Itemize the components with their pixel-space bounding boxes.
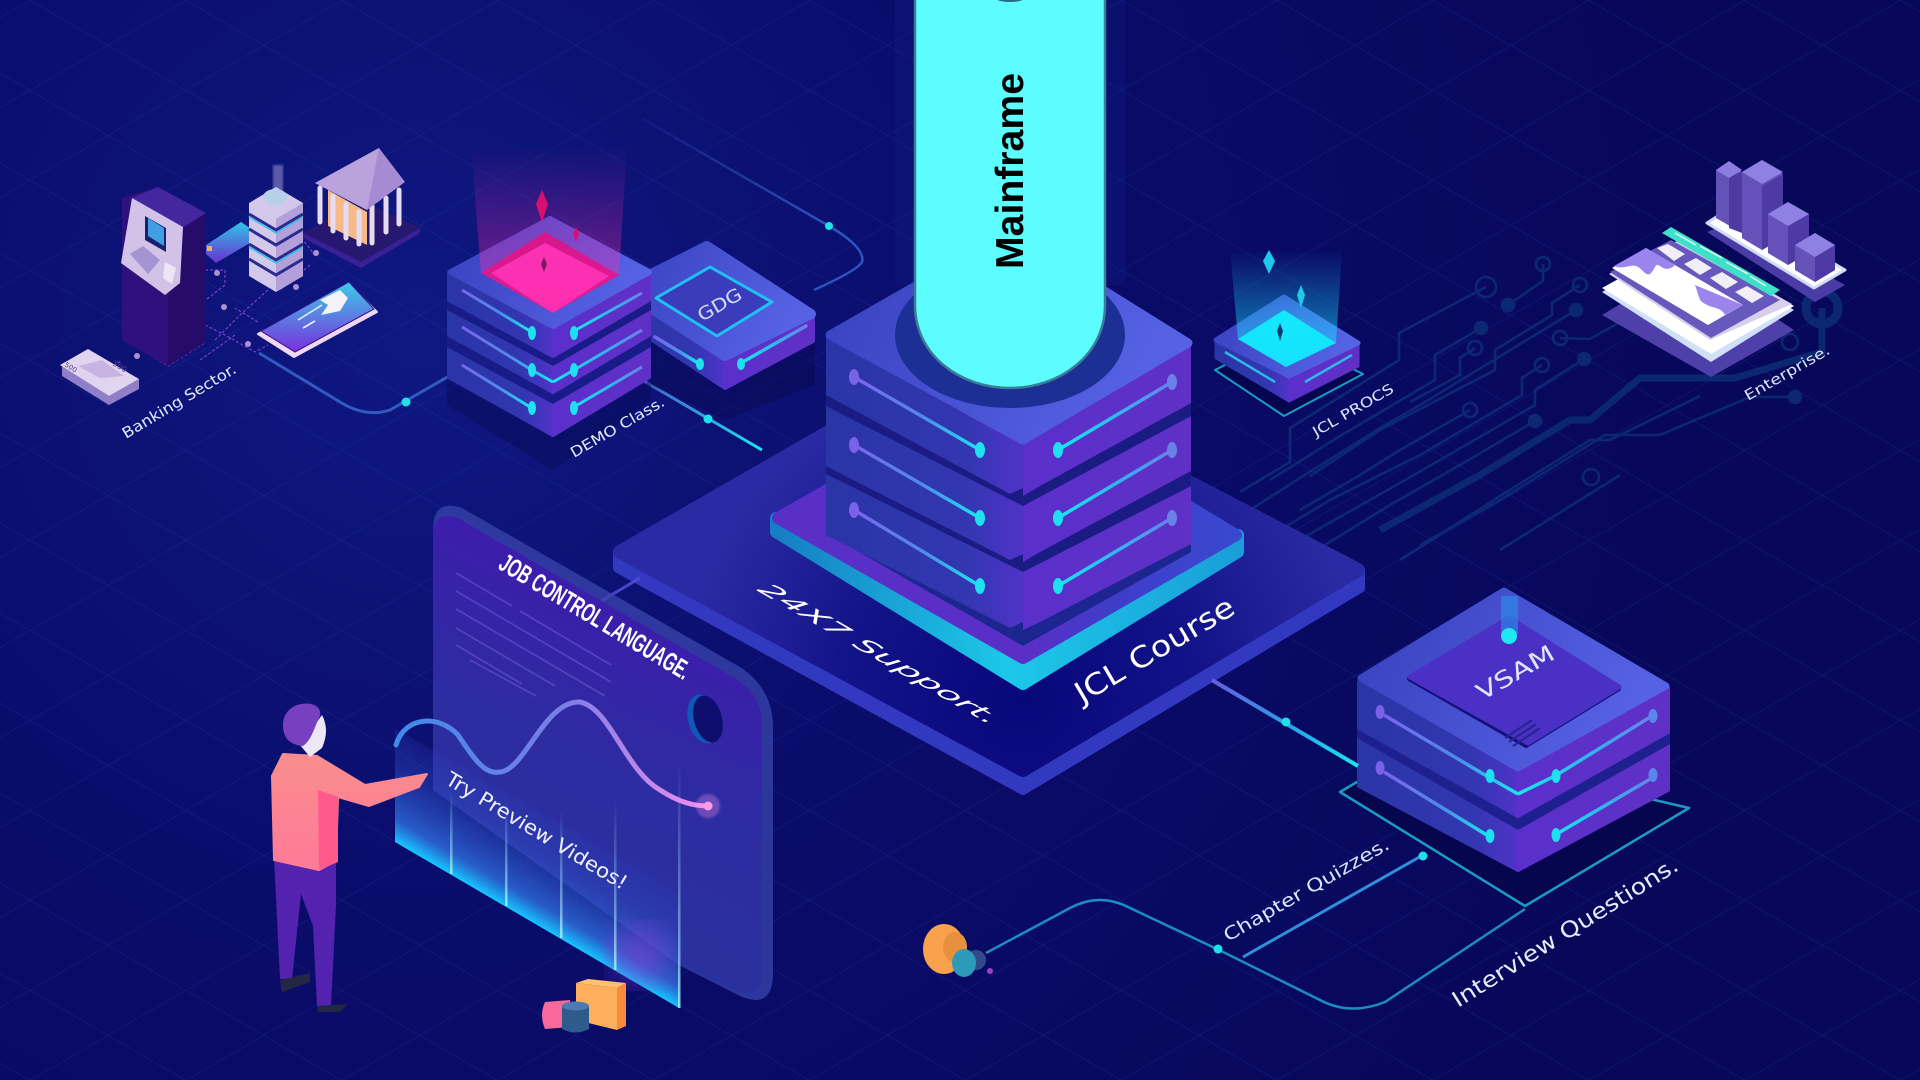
body text lines	[456, 573, 611, 696]
pillar: Mainframe: Mainframe	[989, 73, 1032, 269]
main server column	[826, 232, 1191, 646]
connector: banking to demo	[259, 353, 463, 413]
label: Interview Questions: Interview Questions.	[1448, 853, 1683, 1013]
enterprise illustration	[1602, 160, 1845, 377]
icon: blocks	[542, 979, 626, 1032]
lower layer	[1359, 732, 1668, 870]
node dot	[1418, 852, 1428, 860]
node dot	[1282, 718, 1290, 726]
banking sector illustration	[60, 148, 420, 405]
shoes	[280, 973, 348, 1012]
layer 1	[449, 219, 649, 356]
server: VSAM: VSAM	[1472, 641, 1559, 706]
purple platform	[776, 392, 1238, 684]
footprint	[1340, 745, 1689, 906]
icon: phone	[258, 282, 377, 357]
label: Chapter Quizzes: Chapter Quizzes.	[1220, 834, 1393, 946]
server: VSAM	[1340, 591, 1689, 906]
face	[300, 715, 326, 757]
chart endpoint	[696, 794, 720, 818]
dashed links	[106, 230, 315, 372]
gap	[447, 296, 651, 366]
layer 3	[449, 345, 649, 435]
icon: money	[60, 349, 139, 405]
connector: base to panel	[535, 578, 640, 640]
translucent screen panel	[395, 506, 773, 1008]
icon: bank building	[303, 148, 420, 268]
socket ring	[895, 262, 1125, 408]
inner square	[1409, 679, 1619, 746]
label: JCL Course: JCL Course	[1066, 589, 1241, 711]
label: 24X7 Support: 24X7 Support.	[751, 579, 1007, 728]
pink glow	[471, 145, 627, 313]
server: JCL PROCS	[1215, 250, 1363, 416]
connector: demo to base	[637, 377, 762, 450]
icon: ATM	[121, 187, 206, 366]
connector: base to VSAM	[1212, 680, 1358, 766]
wave chart	[396, 702, 708, 806]
torso and arm	[272, 754, 427, 870]
label: Try Preview Videos: Try Preview Videos!	[441, 766, 632, 894]
legs	[274, 858, 336, 1006]
diamonds	[536, 190, 579, 242]
connector: quizzes	[1243, 855, 1423, 957]
connector: sphere to interview route	[986, 900, 1525, 1009]
pillar: Mainframe	[915, 0, 1105, 388]
label: Job Control Language: JOB CONTROL LANGUAGE.	[494, 547, 696, 685]
column shadow	[826, 500, 1191, 646]
base platform	[618, 360, 1360, 790]
panel back edge	[433, 506, 773, 1000]
icon: money: 500	[63, 361, 78, 374]
side glow of pillar	[895, 0, 1125, 285]
document stack	[1602, 227, 1794, 362]
layer gap	[826, 392, 1191, 506]
connector: top line to GDG	[643, 119, 862, 290]
node dot	[1214, 944, 1222, 954]
plate shadows	[1602, 262, 1794, 377]
server: GDG: GDG	[694, 284, 746, 326]
icon: server tower	[249, 165, 303, 292]
glow bars	[450, 760, 680, 1008]
node dot	[825, 222, 833, 230]
server: DEMO Class	[447, 145, 651, 470]
layer 2	[826, 403, 1191, 562]
layer 2	[449, 306, 649, 392]
layer gap	[826, 462, 1191, 572]
layer 1	[826, 232, 1191, 496]
panel face	[433, 516, 762, 994]
pink screen	[481, 232, 619, 313]
icon: credit card	[206, 222, 250, 263]
label: Banking Sector: Banking Sector.	[119, 360, 239, 442]
label: Enterprise: Enterprise.	[1742, 343, 1833, 404]
layer 3	[826, 472, 1191, 630]
node dot	[402, 398, 410, 406]
upper layer	[1359, 591, 1668, 816]
label: JCL PROCS: JCL PROCS	[1309, 381, 1397, 441]
icon: spheres	[923, 924, 993, 977]
gap	[447, 333, 651, 404]
icon: money: 500	[111, 359, 129, 374]
chart plate	[1707, 160, 1845, 288]
hole	[682, 691, 726, 747]
node dot	[704, 414, 712, 424]
glow wall	[395, 728, 679, 1008]
server: GDG	[619, 246, 815, 420]
dashed link nodes	[134, 250, 319, 359]
layer gap	[1357, 722, 1670, 830]
circuit board traces	[1240, 257, 1838, 560]
hair	[283, 703, 320, 746]
label: DEMO Class: DEMO Class.	[568, 395, 668, 461]
person	[272, 703, 427, 1012]
indicator	[1501, 596, 1518, 634]
purple bottom glow	[610, 925, 670, 985]
